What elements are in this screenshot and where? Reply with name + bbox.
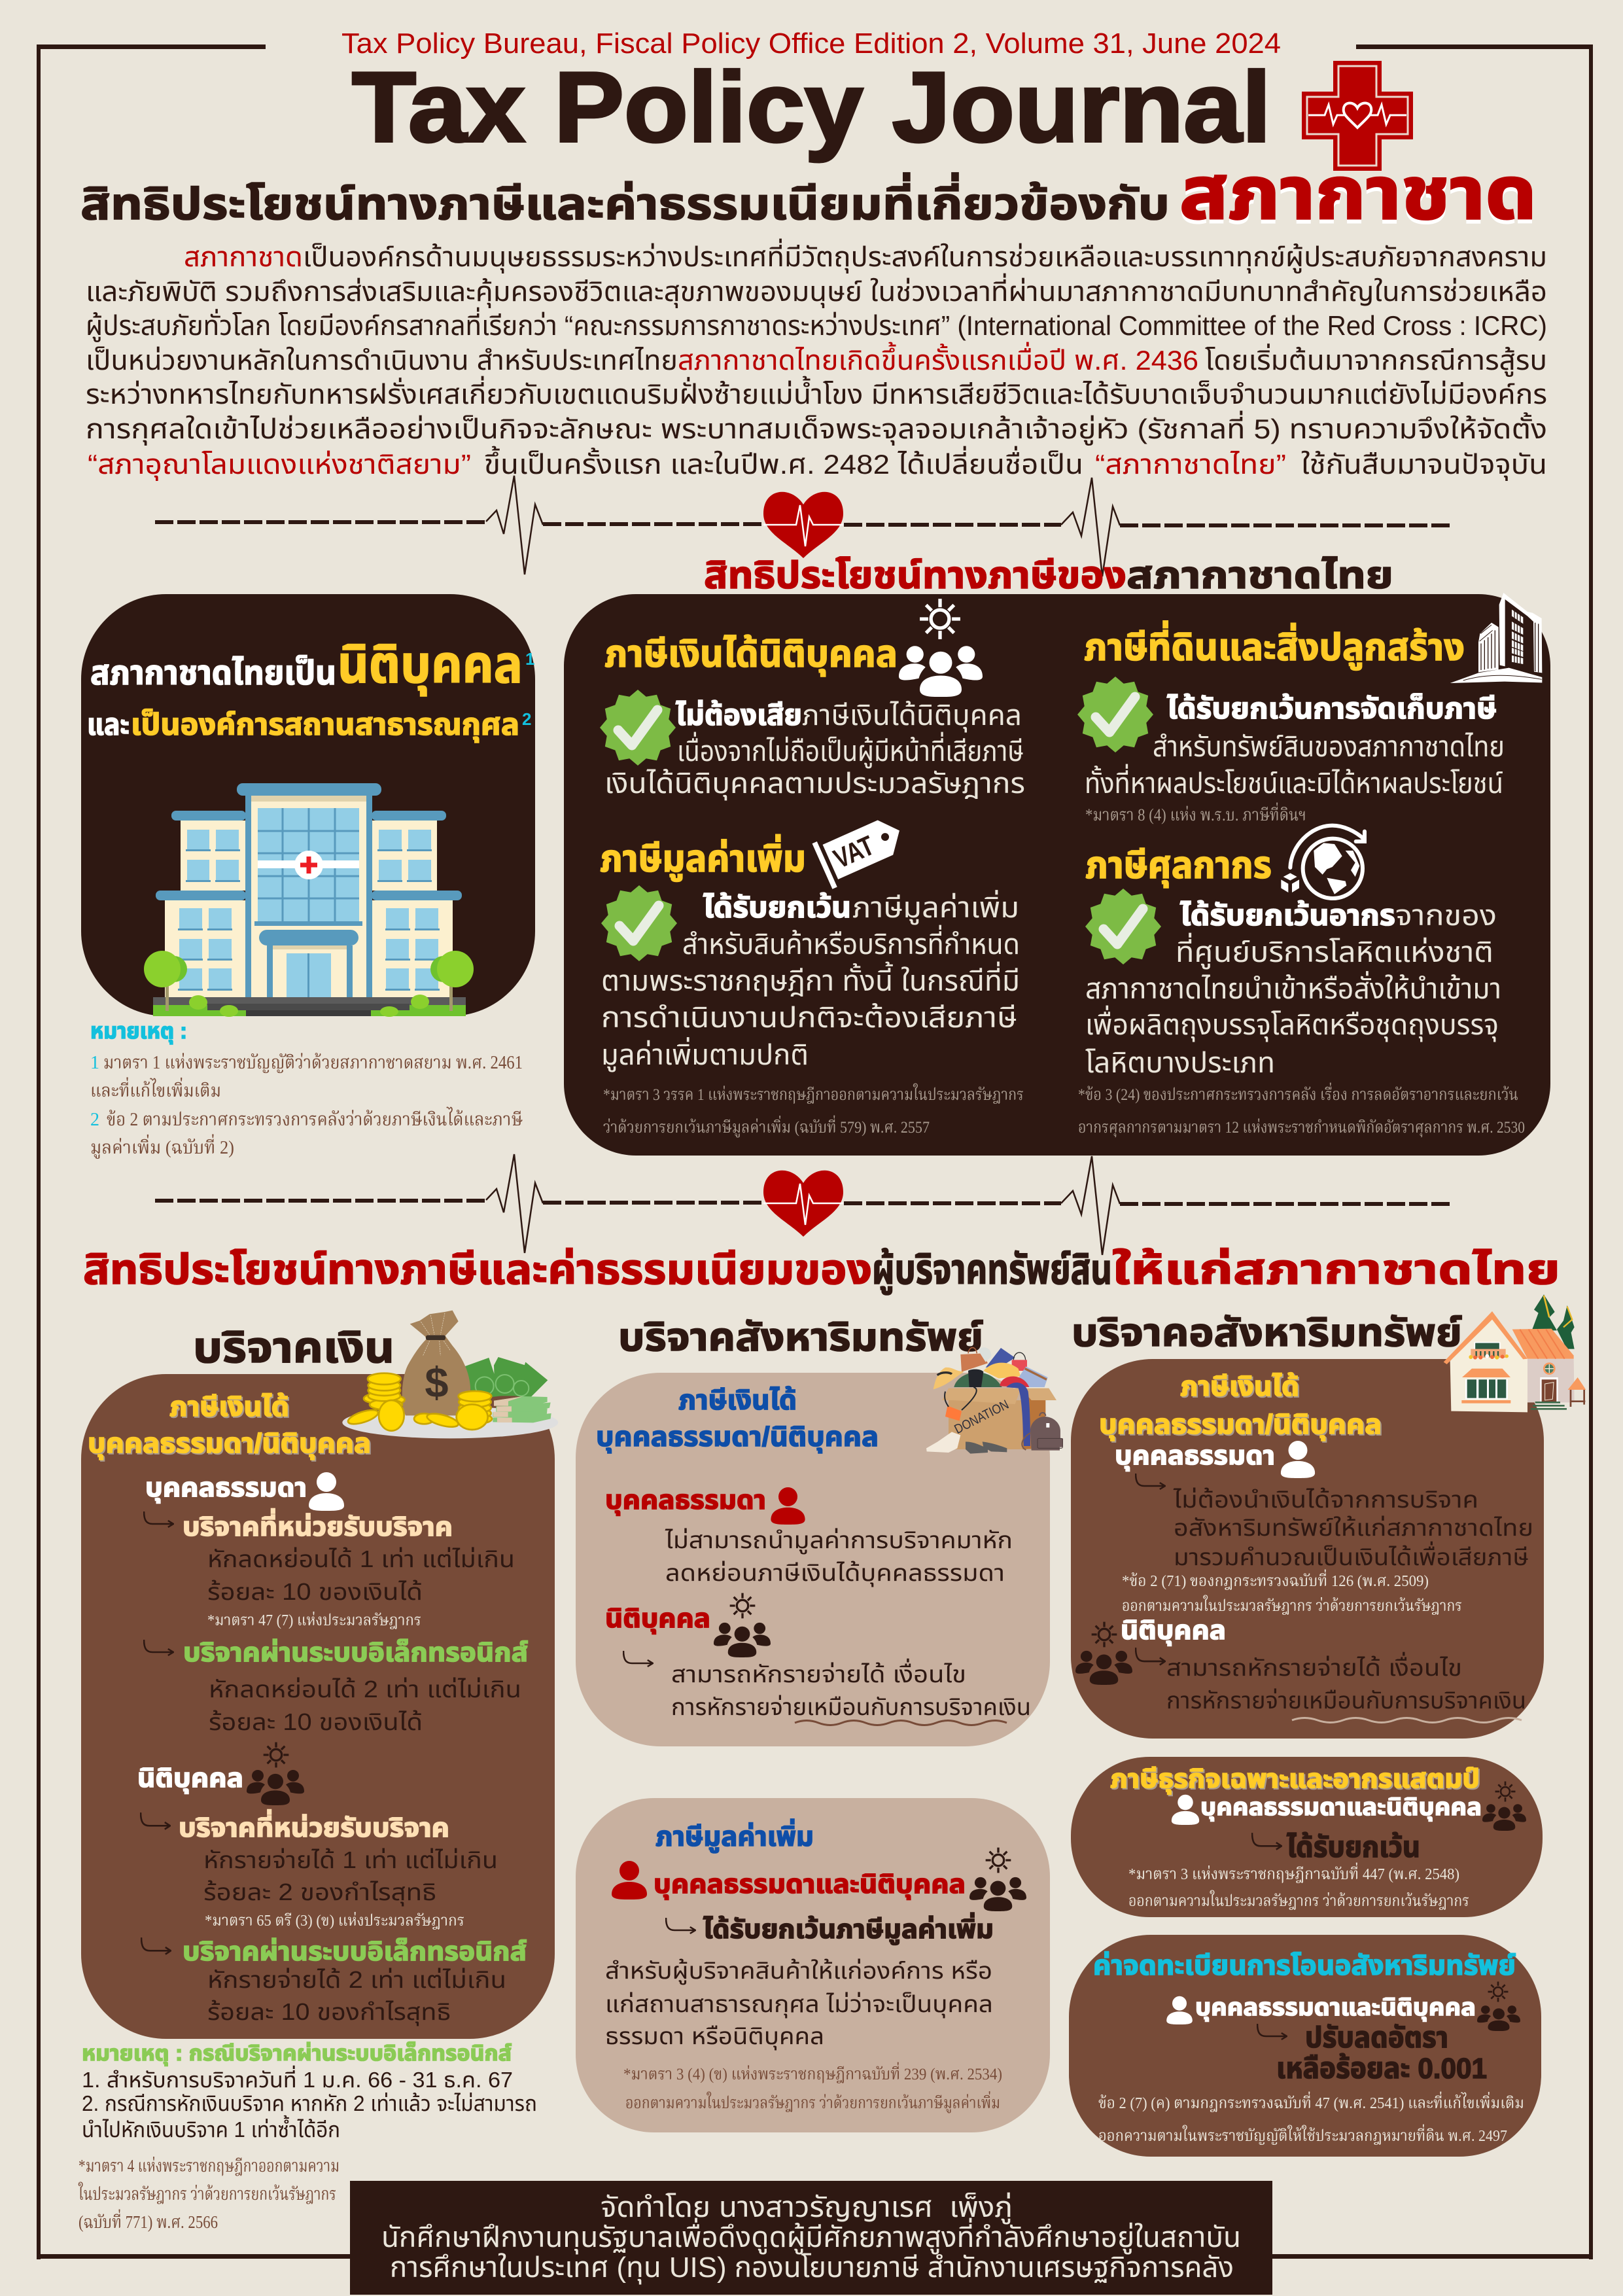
arrow (144, 1511, 173, 1527)
block: customs duty: ภาษีศุลกากร (1085, 844, 1272, 888)
panel: cash donation: ภาษีเงินได้ (169, 1391, 289, 1422)
panel: immovable property transfer fee: ข้อ 2 (7) (ค) ตามกฎกระทรวงฉบับที่ 47 (พ.ศ. 2541) และที่แก้ไขเพิ่มเติม (1098, 2091, 1524, 2112)
section: individuals (144, 1472, 528, 1735)
panel: immovable property income tax: ไม่ต้องนำเงินได้จากการบริจาค (1173, 1486, 1478, 1513)
icon: VAT tag: VAT (829, 830, 879, 874)
block: corporate income tax: เนื่องจากไม่ถือเป็นผู้มีหน้าที่เสียภาษี (677, 732, 1024, 769)
footnotes: legal references: ข้อ 2 ตามประกาศกระทรวงการคลังว่าด้วยภาษีเงินได้และภาษี (107, 1106, 523, 1130)
footnote: decree 771: *มาตรา 4 แห่งพระราชกฤษฎีกาออกตามความ (79, 2156, 340, 2176)
intro paragraph: และภัยพิบัติ รวมถึงการส่งเสริมและคุ้มครองชีวิตและสุขภาพของมนุษย์ ในช่วงเวลาที่ผ่านมาสภากาชาดมีบทบาทสำคัญในการช่วยเหลือ (86, 273, 1547, 308)
footer credit: นักศึกษาฝึกงานทุนรัฐบาลเพื่อดึงดูดผู้มีศักยภาพสูงที่กำลังศึกษาอยู่ในสถาบัน (381, 2217, 1241, 2255)
icon: VAT tag (812, 809, 910, 889)
legal status line 1: นิติบุคคล (338, 635, 523, 696)
title: Tax Policy Journal (352, 52, 1271, 163)
intro paragraph: ระหว่างทหารไทยกับทหารฝรั่งเศสเกี่ยวกับเขตแดนริมฝั่งซ้ายแม่น้ำโขง มีทหารเสียชีวิตและได้รับบาดเจ็บจำนวนมากแต่ยังไม่มีองค์กร (86, 376, 1547, 410)
panel: movable property income tax: นิติบุคคล (605, 1604, 710, 1634)
arrow (666, 1918, 695, 1934)
edition line: Tax Policy Bureau, Fiscal Policy Office Edition 2, Volume 31, June 2024 (341, 27, 1281, 60)
block: customs duty: *ข้อ 3 (24) ของประกาศกระทรวงการคลัง เรื่อง การลดอัตราอากรและยกเว้น (1078, 1082, 1518, 1104)
section: individuals: ร้อยละ 10 ของเงินได้ (209, 1708, 423, 1735)
panel: immovable property income tax: สามารถหักรายจ่ายได้ เงื่อนไข (1166, 1651, 1462, 1681)
panel: cash donation (81, 1311, 558, 2039)
panel: movable property income tax: สามารถหักรายจ่ายได้ เงื่อนไข (671, 1658, 966, 1687)
intro paragraph (86, 238, 1547, 481)
panel: movable property income tax: การหักรายจ่ายเหมือนกับการบริจาคเงิน (671, 1693, 1031, 1720)
legal status line 1: สภากาชาดไทยเป็น (90, 654, 336, 692)
block: VAT: มูลค่าเพิ่มตามปกติ (601, 1037, 809, 1072)
panel: immovable property income tax: บุคคลธรรมดา (1115, 1441, 1275, 1472)
panel: immovable property income tax: บุคคลธรรมดา/นิติบุคคล (1099, 1409, 1382, 1441)
section: juristic persons: ร้อยละ 10 ของกำไรสุทธิ (207, 1998, 451, 2026)
section: individuals: หักลดหย่อนได้ 1 เท่า แต่ไม่เกิน (207, 1545, 515, 1572)
block: customs duty: จากของ (1395, 900, 1497, 932)
intro paragraph: ผู้ประสบภัยทั่วโลก โดยมีองค์กรสากลที่เรียกว่า “คณะกรรมการกาชาดระหว่างประเทศ” (International Committee of the Red Cross : ICRC) (86, 307, 1547, 342)
panel: immovable property transfer fee: ปรับลดอัตรา (1305, 2022, 1448, 2054)
footnote: decree 771: ในประมวลรัษฎากร ว่าด้วยการยกเว้นรัษฎากร (78, 2182, 336, 2204)
panel: movable property VAT: ออกตามความในประมวลรัษฎากร ว่าด้วยการยกเว้นภาษีมูลค่าเพิ่ม (625, 2091, 1000, 2113)
icon: house (1444, 1294, 1586, 1412)
intro paragraph: การกุศลใดเข้าไปช่วยเหลืออย่างเป็นกิจจะลักษณะ พระบาทสมเด็จพระจุลจอมเกล้าเจ้าอยู่หัว (รัชกาลที่ 5) ทราบความจึงให้จัดตั้ง (86, 410, 1547, 446)
block: customs duty (1078, 826, 1525, 1137)
note: electronic donation: หมายเหตุ : กรณีบริจาคผ่านระบบอิเล็กทรอนิกส์ (82, 2041, 512, 2066)
icon: person (309, 1472, 344, 1511)
arrow (623, 1651, 653, 1667)
block: customs duty: เพื่อผลิตถุงบรรจุโลหิตหรือชุดถุงบรรจุ (1085, 1005, 1499, 1042)
arrow (141, 1812, 170, 1829)
arrow (1136, 1474, 1165, 1489)
section: individuals: บริจาคที่หน่วยรับบริจาค (183, 1508, 453, 1542)
panel: movable property VAT: สำหรับผู้บริจาคสินค้าให้แก่องค์การ หรือ (605, 1957, 992, 1985)
panel: specific business tax and stamp duty: *มาตรา 3 แห่งพระราชกฤษฎีกาฉบับที่ 447 (พ.ศ. 2548) (1128, 1862, 1459, 1883)
arrow (1252, 1833, 1282, 1850)
block: corporate income tax: ไม่ต้องเสีย (676, 699, 802, 732)
panel: immovable property transfer fee: เหลือร้อยละ 0.001 (1276, 2053, 1487, 2085)
footnotes: legal references: 1 (90, 1053, 99, 1073)
icon: hospital building (144, 783, 474, 1017)
block: VAT: ภาษีมูลค่าเพิ่ม (600, 834, 806, 882)
section: juristic persons: หักรายจ่ายได้ 2 เท่า แต่ไม่เกิน (207, 1966, 506, 1993)
block: VAT (600, 809, 1024, 1137)
panel: legal status (81, 594, 535, 1017)
panel: immovable property income tax: การหักรายจ่ายเหมือนกับการบริจาคเงิน (1166, 1687, 1526, 1714)
note: electronic donation: นำไปหักเงินบริจาค 1 เท่าซ้ำได้อีก (82, 2115, 340, 2142)
heading: tax benefits of Thai Red Cross: สภากาชาดไทย (1126, 554, 1393, 597)
intro paragraph: ใช้กันสืบมาจนปัจจุบัน (1301, 449, 1547, 481)
icon: check badge (1085, 889, 1161, 964)
heading: donor benefits: ให้แก่สภากาชาดไทย (1112, 1246, 1560, 1293)
block: land and building tax: สำหรับทรัพย์สินของสภากาชาดไทย (1153, 731, 1505, 763)
footnotes: legal references: มูลค่าเพิ่ม (ฉบับที่ 2) (90, 1134, 234, 1159)
intro paragraph: โดยเริ่มต้นมาจากกรณีการสู้รบ (1205, 343, 1547, 377)
icon: office towers (1450, 593, 1542, 683)
section: juristic persons: หักรายจ่ายได้ 1 เท่า แต่ไม่เกิน (203, 1846, 498, 1873)
icon: donation box (926, 1347, 1063, 1454)
panel: movable property VAT: ธรรมดา หรือนิติบุคคล (605, 2022, 824, 2050)
panel: movable property income tax: ภาษีเงินได้ (678, 1385, 797, 1415)
section: individuals: บุคคลธรรมดา (145, 1474, 307, 1504)
section: juristic persons: *มาตรา 65 ตรี (3) (ข) แห่งประมวลรัษฎากร (205, 1911, 464, 1930)
block: land and building tax: ทั้งที่หาผลประโยชน์และมิได้หาผลประโยชน์ (1085, 764, 1503, 800)
block: corporate income tax: ภาษีเงินได้นิติบุคคล (604, 633, 898, 677)
block: land and building tax: ภาษีที่ดินและสิ่งปลูกสร้าง (1084, 620, 1465, 671)
block: VAT: ว่าด้วยการยกเว้นภาษีมูลค่าเพิ่ม (ฉบับที่ 579) พ.ศ. 2557 (603, 1115, 930, 1137)
icon: sun over people (714, 1593, 771, 1657)
note: electronic donation: 1. สำหรับการบริจาควันที่ 1 ม.ค. 66 - 31 ธ.ค. 67 (82, 2065, 513, 2092)
panel: movable property VAT: ภาษีมูลค่าเพิ่ม (655, 1818, 814, 1853)
subtitle: สภากาชาด (1179, 152, 1537, 234)
panel: movable property income tax: บุคคลธรรมดา (605, 1486, 766, 1516)
section: individuals: บริจาคผ่านระบบอิเล็กทรอนิกส์ (183, 1638, 528, 1667)
icon: red cross with heartbeat (1302, 61, 1413, 171)
panel: immovable property transfer fee (1069, 1935, 1541, 2157)
divider: heartbeat 1 (155, 476, 1454, 576)
legal status line 1: 1 (525, 649, 534, 669)
footnotes: legal references (90, 1052, 523, 1159)
icon: check badge (600, 690, 676, 766)
panel: immovable property income tax: มารวมคำนวณเป็นเงินได้เพื่อเสียภาษี (1174, 1541, 1529, 1570)
footer credit: การศึกษาในประเทศ (ทุน UIS) กองนโยบายภาษี สำนักงานเศรษฐกิจการคลัง (390, 2252, 1234, 2285)
heading: tax benefits of Thai Red Cross (704, 554, 1393, 597)
icon: money bag, coins and cash: $ (425, 1358, 448, 1406)
icon: person (1281, 1441, 1315, 1478)
panel: specific business tax and stamp duty: ออกตามความในประมวลรัษฎากร ว่าด้วยการยกเว้นรัษฎากร (1128, 1889, 1469, 1910)
section: individuals: หักลดหย่อนได้ 2 เท่า แต่ไม่เกิน (209, 1676, 521, 1703)
block: customs duty: ได้รับยกเว้นอากร (1180, 900, 1395, 932)
block: land and building tax: *มาตรา 8 (4) แห่ง พ.ร.บ. ภาษีที่ดินฯ (1085, 802, 1306, 824)
footnote heading: หมายเหตุ : (90, 1019, 187, 1044)
section: juristic persons: ร้อยละ 2 ของกำไรสุทธิ (203, 1879, 436, 1906)
panel: movable property VAT: บุคคลธรรมดาและนิติบุคคล (654, 1870, 966, 1900)
panel: immovable property income tax: ภาษีเงินได้ (1180, 1371, 1299, 1402)
panel: movable property VAT (576, 1798, 1050, 2132)
icon: sun over people (969, 1848, 1026, 1911)
icon: check badge (1077, 677, 1153, 752)
icon: person (1166, 1996, 1193, 2024)
panel: immovable property transfer fee: ออกความตามในพระราชบัญญัติให้ใช้ประมวลกฎหมายที่ดิน พ.ศ. 2497 (1098, 2124, 1507, 2145)
subtitle: สิทธิประโยชน์ทางภาษีและค่าธรรมเนียมที่เกี่ยวข้องกับ (80, 173, 1170, 229)
panel: specific business tax and stamp duty: ได้รับยกเว้น (1287, 1831, 1420, 1863)
panel: cash donation: บุคคลธรรมดา/นิติบุคคล (88, 1428, 371, 1460)
block: VAT: ภาษีมูลค่าเพิ่ม (852, 890, 1019, 925)
block: VAT: ได้รับยกเว้น (703, 892, 851, 924)
panel: movable property VAT: ได้รับยกเว้นภาษีมูลค่าเพิ่ม (703, 1912, 994, 1945)
legal status line 2: 2 (522, 709, 531, 729)
footnotes: legal references: 2 (90, 1110, 99, 1130)
panel: specific business tax and stamp duty: บุคคลธรรมดาและนิติบุคคล (1200, 1793, 1482, 1821)
heading: donor benefits (83, 1246, 1560, 1295)
icon: person (1172, 1795, 1199, 1825)
block: customs duty: ที่ศูนย์บริการโลหิตแห่งชาติ (1176, 932, 1493, 970)
block: VAT: สำหรับสินค้าหรือบริการที่กำหนด (682, 925, 1020, 961)
icon: money bag, coins and cash (342, 1311, 558, 1438)
section: juristic persons: บริจาคผ่านระบบอิเล็กทรอนิกส์ (183, 1937, 527, 1966)
heading: cash donation: บริจาคเงิน (193, 1323, 394, 1371)
panel: movable property income tax (576, 1347, 1063, 1746)
arrow (141, 1937, 171, 1954)
intro paragraph: “สภาอุณาโลมแดงแห่งชาติสยาม” (88, 449, 471, 481)
panel: immovable property income tax: อสังหาริมทรัพย์ให้แก่สภากาชาดไทย (1174, 1514, 1533, 1541)
arrow (1257, 2024, 1287, 2040)
legal status line 2: และ (87, 707, 130, 741)
legal status line 1 (90, 635, 534, 696)
icon: check badge (601, 885, 677, 961)
section: juristic persons (137, 1742, 527, 2026)
arrow (144, 1640, 173, 1655)
panel: immovable property income tax (1071, 1294, 1586, 1739)
note: electronic donation (82, 2041, 537, 2142)
heading: movable property: บริจาคสังหาริมทรัพย์ (618, 1315, 983, 1359)
icon: sun over people (247, 1742, 304, 1805)
footer credit: จัดทำโดย นางสาวรัญญาเรศ เพ็งภู่ (601, 2191, 1013, 2225)
panel: tax exemptions (564, 593, 1550, 1156)
panel: immovable property income tax: นิติบุคคล (1121, 1616, 1226, 1646)
icon: sun over people (1075, 1622, 1132, 1685)
icon: globe with arrow and parcel (1281, 826, 1365, 898)
panel: immovable property income tax: ออกตามความในประมวลรัษฎากร ว่าด้วยการยกเว้นรัษฎากร (1122, 1594, 1462, 1615)
icon: person (612, 1861, 647, 1899)
intro paragraph: ขึ้นเป็นครั้งแรก และในปีพ.ศ. 2482 ได้เปลี่ยนชื่อเป็น (484, 446, 1083, 480)
panel: immovable property transfer fee: ค่าจดทะเบียนการโอนอสังหาริมทรัพย์ (1093, 1950, 1516, 1981)
footer credit (350, 2181, 1272, 2295)
block: corporate income tax (600, 599, 1025, 801)
icon: sun over people (1482, 1782, 1526, 1831)
block: customs duty: อากรศุลกากรตามมาตรา 12 แห่งพระราชกำหนดพิกัดอัตราศุลกากร พ.ศ. 2530 (1078, 1118, 1525, 1137)
icon: sun over people (899, 599, 983, 697)
heading: donor benefits: ผู้บริจาคทรัพย์สิน (872, 1246, 1112, 1295)
footnotes: legal references: และที่แก้ไขเพิ่มเติม (90, 1077, 221, 1101)
panel: movable property income tax: บุคคลธรรมดา/นิติบุคคล (596, 1421, 879, 1453)
heading: tax benefits of Thai Red Cross: สิทธิประโยชน์ทางภาษีของ (704, 554, 1126, 597)
heading: donor benefits: สิทธิประโยชน์ทางภาษีและค่าธรรมเนียมของ (83, 1246, 872, 1293)
block: customs duty: โลหิตบางประเภท (1085, 1047, 1275, 1079)
block: VAT: *มาตรา 3 วรรค 1 แห่งพระราชกฤษฎีกาออกตามความในประมวลรัษฎากร (603, 1083, 1024, 1104)
section: individuals: ร้อยละ 10 ของเงินได้ (207, 1578, 423, 1605)
intro paragraph: สภากาชาดไทยเกิดขึ้นครั้งแรกเมื่อปี พ.ศ. 2436 (678, 342, 1198, 376)
footnote: decree 771: (ฉบับที่ 771) พ.ศ. 2566 (79, 2209, 218, 2232)
panel: specific business tax and stamp duty: ภาษีธุรกิจเฉพาะและอากรแสตมป์ (1110, 1765, 1480, 1795)
panel: movable property VAT: แก่สถานสาธารณกุศล ไม่ว่าจะเป็นบุคคล (605, 1990, 993, 2018)
icon: person (771, 1487, 805, 1525)
block: VAT: การดำเนินงานปกติจะต้องเสียภาษี (601, 1002, 1017, 1034)
block: VAT: ตามพระราชกฤษฎีกา ทั้งนี้ ในกรณีที่มี (601, 961, 1020, 997)
subtitle (80, 152, 1537, 234)
intro paragraph: เป็นองค์กรด้านมนุษยธรรมระหว่างประเทศที่มีวัตถุประสงค์ในการช่วยเหลือและบรรเทาทุกข์ผู้ประสบภัยจากสงคราม (303, 238, 1547, 274)
section: individuals: *มาตรา 47 (7) แห่งประมวลรัษฎากร (207, 1611, 421, 1629)
block: corporate income tax: เงินได้นิติบุคคลตามประมวลรัษฎากร (604, 768, 1025, 801)
divider: heartbeat 2 (155, 1154, 1454, 1255)
section: juristic persons: บริจาคที่หน่วยรับบริจาค (179, 1809, 449, 1843)
block: corporate income tax: ภาษีเงินได้นิติบุคคล (802, 699, 1022, 733)
panel: movable property income tax: ลดหย่อนภาษีเงินได้บุคคลธรรมดา (665, 1559, 1005, 1587)
legal status line 2: เป็นองค์การสถานสาธารณกุศล (131, 707, 519, 743)
panel: movable property VAT: *มาตรา 3 (4) (ข) แห่งพระราชกฤษฎีกาฉบับที่ 239 (พ.ศ. 2534) (623, 2062, 1002, 2083)
footnotes: legal references: มาตรา 1 แห่งพระราชบัญญัติว่าด้วยสภากาชาดสยาม พ.ศ. 2461 (103, 1052, 523, 1073)
block: customs duty: สภากาชาดไทยนำเข้าหรือสั่งให้นำเข้ามา (1085, 971, 1501, 1005)
panel: immovable property income tax: *ข้อ 2 (71) ของกฎกระทรวงฉบับที่ 126 (พ.ศ. 2509) (1122, 1569, 1429, 1590)
panel: immovable property transfer fee: บุคคลธรรมดาและนิติบุคคล (1195, 1994, 1476, 2021)
intro paragraph: “สภากาชาดไทย” (1095, 449, 1286, 480)
icon: sun over people (1477, 1982, 1520, 2031)
arrow (1136, 1648, 1165, 1665)
icon: donation box: DONATION (952, 1398, 1011, 1437)
heading: immovable property: บริจาคอสังหาริมทรัพย์ (1072, 1311, 1462, 1354)
intro paragraph: เป็นหน่วยงานหลักในการดำเนินงาน สำหรับประเทศไทย (86, 345, 678, 376)
panel: movable property income tax: ไม่สามารถนำมูลค่าการบริจาคมาหัก (665, 1527, 1013, 1554)
intro paragraph: สภากาชาด (184, 241, 303, 272)
panel: specific business tax and stamp duty (1071, 1757, 1543, 1917)
section: juristic persons: นิติบุคคล (137, 1764, 243, 1794)
block: land and building tax (1077, 593, 1542, 824)
block: land and building tax: ได้รับยกเว้นการจัดเก็บภาษี (1167, 693, 1497, 725)
note: electronic donation: 2. กรณีการหักเงินบริจาค หากหัก 2 เท่าแล้ว จะไม่สามารถ (82, 2091, 537, 2115)
footnote: decree 771 (78, 2156, 340, 2232)
